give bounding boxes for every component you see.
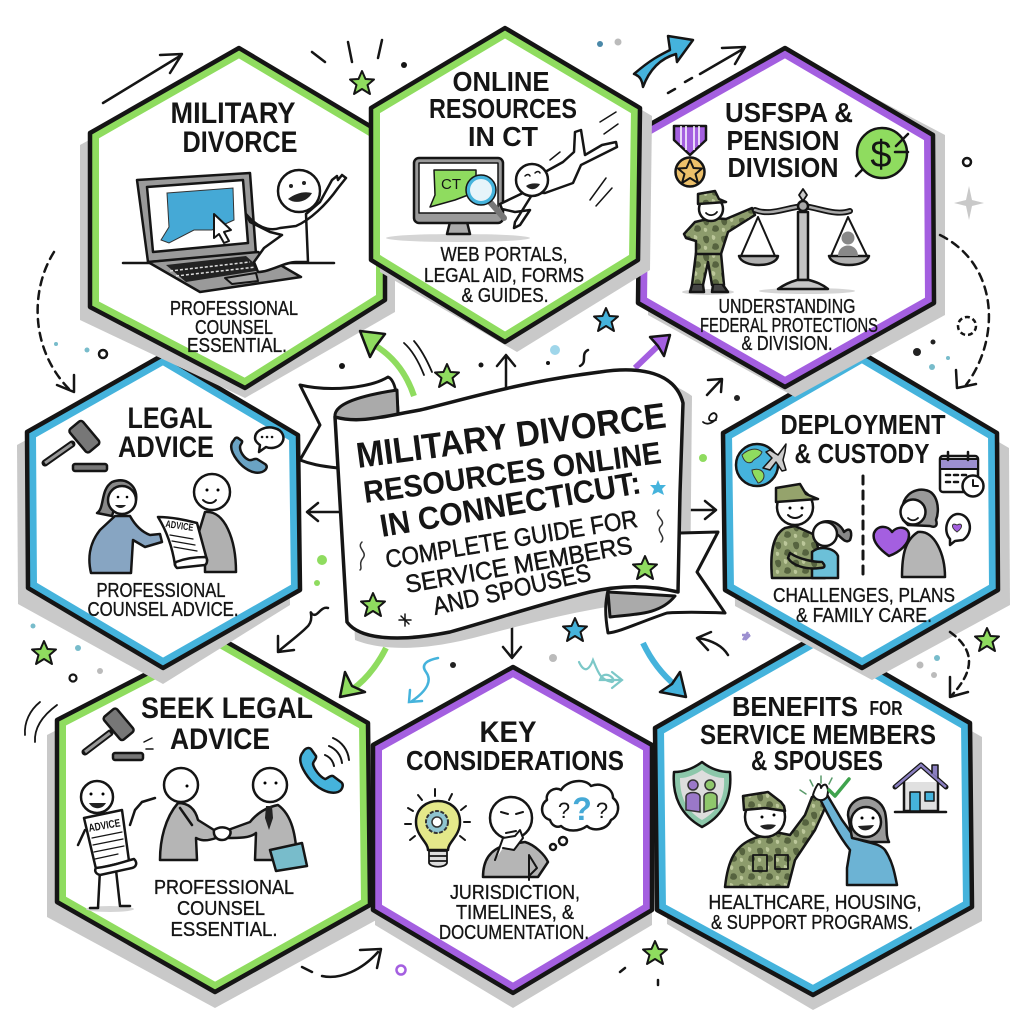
text block: COUNSEL	[195, 317, 273, 339]
icon: house	[895, 765, 946, 812]
text block	[700, 296, 878, 355]
icon: question thought bubble: ?	[572, 791, 592, 827]
banner left tail	[300, 377, 398, 468]
heading: FOR	[870, 698, 903, 720]
icon: two people shaking hands	[160, 768, 307, 871]
icon: woman and man with advice document	[89, 474, 236, 573]
icon: thinking person	[483, 797, 548, 880]
icon: soldier and woman high five	[725, 776, 897, 887]
banner right fold	[608, 592, 675, 617]
banner title text: COMPLETE GUIDE FOR	[383, 505, 640, 574]
banner body	[335, 370, 683, 638]
heading: RESOURCES	[429, 93, 577, 124]
icon: figure with advice scroll	[78, 781, 155, 912]
panel: military divorce	[80, 48, 395, 398]
banner stars	[360, 480, 666, 626]
heading: & CUSTODY	[794, 438, 930, 469]
icon: flying figure	[500, 112, 618, 228]
icon: scales of justice	[739, 189, 869, 294]
icon: soldier hugging child	[771, 484, 851, 578]
heading	[406, 716, 624, 776]
text block: ESSENTIAL.	[187, 335, 287, 357]
text block	[88, 580, 238, 621]
icon: question thought bubble: ?	[596, 798, 608, 823]
text block	[424, 244, 584, 307]
banner title text: SERVICE MEMBERS	[403, 531, 635, 599]
text block	[154, 877, 294, 941]
text block: COUNSEL	[177, 898, 265, 920]
heading: KEY	[480, 716, 536, 749]
heading: CONSIDERATIONS	[406, 745, 624, 776]
text block: HEALTHCARE, HOUSING,	[708, 892, 922, 914]
banner title text: RESOURCES ONLINE	[361, 435, 663, 510]
text block	[708, 892, 922, 934]
text block: & GUIDES.	[462, 285, 548, 307]
banner title text	[354, 395, 668, 621]
heading: IN CT	[468, 121, 538, 152]
icon: figure with advice scroll: ADVICE	[88, 817, 121, 835]
heading: BENEFITS	[732, 691, 858, 722]
icon: question thought bubble: ?	[558, 798, 570, 823]
heading: DIVORCE	[182, 126, 298, 159]
text block: ESSENTIAL.	[170, 919, 278, 941]
heading: & SPOUSES	[751, 745, 883, 776]
icon: dollar coin: $	[870, 134, 892, 176]
heading	[118, 402, 214, 464]
icon: woman holding heart	[874, 490, 970, 577]
text block: CHALLENGES, PLANS	[773, 585, 955, 607]
text block: FEDERAL PROTECTIONS	[700, 315, 878, 337]
text block: TIMELINES, &	[456, 902, 575, 924]
panel: USFSPA and pension division	[638, 48, 945, 397]
heading: SEEK LEGAL	[141, 692, 313, 725]
icon: medal	[674, 126, 706, 186]
divider	[862, 476, 864, 577]
text block: UNDERSTANDING	[718, 296, 856, 318]
banner title text: AND SPOUSES	[430, 559, 593, 621]
icon: laptop with Connecticut map	[137, 173, 301, 292]
icon: light bulb with gear	[405, 789, 470, 867]
panel: online resources in CT	[371, 28, 652, 352]
text block: LEGAL AID, FORMS	[424, 265, 584, 287]
icon: ground line	[123, 262, 334, 264]
panel: seek legal advice	[47, 637, 380, 1008]
arrows: connectors from banner to panels	[307, 331, 716, 697]
text block: PROFESSIONAL	[170, 298, 298, 320]
icon: woman and man with advice document: ADVICE	[165, 519, 194, 534]
heading	[780, 409, 946, 469]
text block: & SUPPORT PROGRAMS.	[711, 912, 913, 934]
heading: PENSION	[726, 125, 840, 156]
banner title text: IN CONNECTICUT:	[377, 464, 643, 544]
panel: key considerations	[373, 667, 652, 1008]
text block	[439, 882, 589, 944]
text block: & DIVISION.	[742, 333, 832, 355]
heading: DIVISION	[728, 152, 838, 183]
text block: COUNSEL ADVICE.	[88, 599, 238, 621]
icon: cheering figure	[246, 170, 346, 272]
banner right tail	[606, 532, 725, 633]
panel: deployment and custody	[723, 353, 1010, 680]
icon: phone with signal	[300, 738, 349, 793]
icon: shield with family	[674, 762, 730, 827]
icon: monitor with CT map and magnifier	[386, 158, 530, 242]
heading: MILITARY	[170, 97, 296, 130]
heading	[700, 691, 936, 776]
icon: gavel	[85, 707, 153, 760]
heading: ONLINE	[452, 66, 550, 97]
text block	[773, 585, 955, 627]
text block: JURISDICTION,	[450, 882, 580, 904]
heading: USFSPA &	[725, 97, 853, 128]
text block: PROFESSIONAL	[154, 877, 294, 899]
panel: legal advice	[17, 355, 300, 684]
heading	[170, 97, 298, 159]
heading: ADVICE	[118, 431, 214, 464]
heading: ADVICE	[170, 723, 270, 756]
heading: LEGAL	[128, 402, 212, 435]
text block: PROFESSIONAL	[96, 580, 226, 602]
heading	[725, 97, 853, 183]
text block	[170, 298, 298, 357]
icon: calendar with clock	[940, 452, 984, 496]
banner left fold	[335, 390, 398, 420]
title banner	[300, 370, 725, 648]
icon: phone and speech bubble	[231, 427, 283, 473]
icon: gavel	[45, 420, 107, 471]
panel: benefits	[655, 635, 982, 1010]
icon: soldier	[682, 191, 755, 295]
icon: monitor with CT map and magnifier: CT	[441, 176, 461, 193]
heading	[429, 66, 577, 152]
banner title text: MILITARY DIVORCE	[354, 395, 668, 476]
text block: WEB PORTALS,	[440, 244, 568, 266]
text block: DOCUMENTATION.	[439, 922, 589, 944]
heading	[141, 692, 313, 756]
heading: SERVICE MEMBERS	[700, 719, 936, 750]
icon: globe with plane	[736, 444, 786, 486]
heading: DEPLOYMENT	[780, 409, 946, 440]
text block: & FAMILY CARE.	[796, 605, 932, 627]
icon: dollar coin	[856, 128, 908, 178]
icon: question thought bubble	[542, 781, 618, 850]
